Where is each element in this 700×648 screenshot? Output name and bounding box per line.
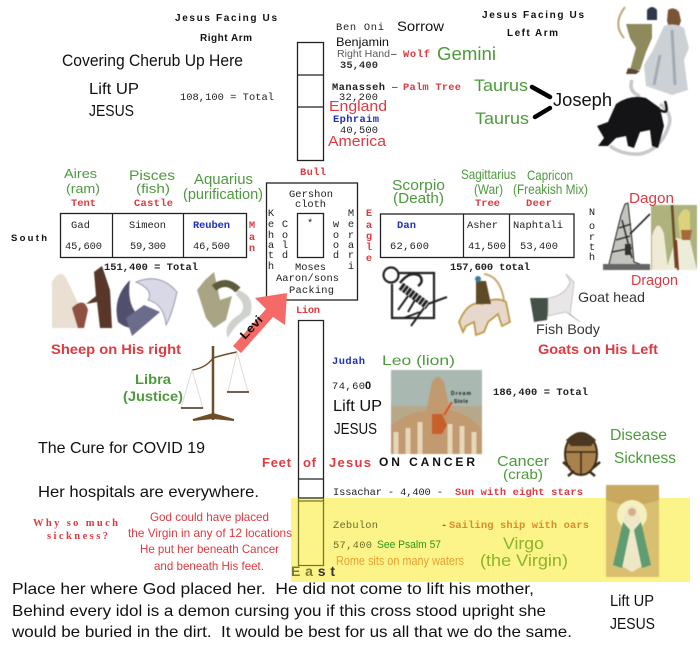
table: south camp: Gad [71,220,90,232]
left zodiac labels: Aires [64,166,98,181]
text: God could have placed: and beneath His feet. [154,559,264,573]
Judah block [332,352,455,438]
highlight: yellow band [291,498,690,582]
text: The cure: Her hospitals are everywhere. [38,484,259,501]
text: Why so much sickness: Why so much [33,518,118,529]
left zodiac labels: Aquarius [194,171,253,188]
text: Zebulon block: See Psalm 57 [377,539,441,551]
text: The cure [38,440,259,501]
text: Zebulon block: Zebulon [333,520,378,532]
panel: tabernacle centre: w [333,219,340,231]
panel: tabernacle centre: Aaron/sons [276,273,339,285]
text: Zebulon block [333,520,589,570]
left zodiac labels [64,166,263,210]
label: North: r [589,232,595,244]
Taurus and Joseph labels: Taurus [474,76,528,95]
labels: Dagon and Dragon [629,190,678,289]
label: Man: M [249,220,255,232]
north arm tribes: Ben Oni [336,22,384,34]
north arm tribes: Ephraim [333,114,379,126]
icon: pope photo [651,205,697,270]
labels: Dagon and Dragon: Dagon [629,190,674,207]
north arm tribes: Right Hand [337,49,390,60]
north arm tribes: – [392,82,398,93]
heading: top right labels [482,10,584,39]
labels: Sheep and Libra [51,341,183,404]
text: God could have placed: He put her beneath Cancer [140,542,279,556]
left zodiac labels: Tent [71,198,96,210]
total: south: 151,400 = Total [104,262,198,274]
north arm tribes: 32,200 [339,92,378,104]
labels: Sheep and Libra: Sheep on His right [51,341,181,357]
labels: Disease Sickness: Sickness [614,450,676,467]
panel: tabernacle centre: r [348,250,354,262]
table: south camp: Simeon [129,220,166,232]
panel: tabernacle centre: r [348,230,354,242]
labels: Cancer: Cancer [497,453,549,470]
table: south camp [60,213,246,258]
total: Judah camp: 186,400 = Total [493,387,588,399]
panel: tabernacle centre: Moses [295,262,326,274]
image: sphinx with dream stele: Stele [454,399,468,405]
north arm tribes: – [391,49,397,60]
panel: tabernacle centre: C [282,219,288,231]
north arm tribes: Wolf [403,49,430,61]
icon: Capricorn goat [530,274,580,322]
table: north camp [380,214,574,258]
table: north camp: 53,400 [520,241,558,253]
image: sphinx with dream stele [391,370,482,454]
labels: Dagon and Dragon: Dragon [631,272,678,289]
image: Virgin Mary card [606,485,659,577]
label: Man [249,220,255,255]
north arm tribes: England [329,98,387,115]
heading: top left labels: Lift UP [89,81,139,98]
panel: tabernacle centre: i [348,261,354,273]
left zodiac labels: Castle [134,198,173,210]
label: Man: a [249,232,255,244]
icon: scorpion [384,268,447,326]
label: Eagle: a [366,220,372,232]
north arm tribes: 40,500 [340,125,378,137]
label: Eagle [366,208,372,265]
right zodiac labels: Scorpio [392,177,445,194]
Judah block: Lift UP [333,398,382,415]
panel: tabernacle centre: K [268,208,275,220]
text: Zebulon block: - [441,520,447,532]
table: north camp: 62,600 [390,241,429,253]
table: north camp: Asher [467,220,498,232]
labels: Cancer: (crab) [503,466,543,482]
text: Issachar row: Sun with eight stars [455,487,583,499]
panel: tabernacle centre: l [282,240,288,252]
label: North: t [589,242,595,254]
text: God could have placed: the Virgin in any of 12 locations [128,526,292,540]
label: North: N [589,207,595,219]
label: Eagle: l [366,242,372,254]
text: Zebulon block: Virgo [503,534,544,553]
panel: tabernacle centre: e [268,219,274,231]
icon: Pisces fish [116,279,177,336]
panel: tabernacle centre: o [333,230,339,242]
label: Man: n [249,243,255,255]
Taurus and Joseph labels [474,76,612,128]
panel: tabernacle centre: d [333,250,339,262]
panel: tabernacle centre: t [268,250,274,262]
text: closing paragraph: Place her where God placed her. He did not come to lift his mother, [12,581,534,598]
Judah block: 0 [365,380,371,392]
cross: north arm [297,42,324,160]
north arm tribes: Gemini [437,44,496,64]
Taurus and Joseph labels: Joseph [553,90,612,110]
panel: tabernacle centre: * [307,218,313,230]
north arm tribes: Palm Tree [403,82,461,94]
text: Issachar row [333,487,583,499]
label: Eagle: e [366,253,372,265]
right zodiac labels: Deer [526,198,552,210]
labels: goat and fish: Goats on His Left [538,341,658,357]
north arm tribes: 35,400 [340,60,378,72]
north arm tribes: Benjamin [336,35,389,49]
text: Lift UP JESUS bottom: JESUS [610,616,655,633]
heading: top left labels [62,13,277,120]
heading: top left labels: Covering Cherub Up Here [62,51,243,70]
panel: tabernacle centre: M [348,208,354,220]
text: closing paragraph: would be buried in the dirt. It would be best for us all that we do the same. [11,624,572,641]
label: Lion: Lion [296,305,320,317]
north arm tribes: Manasseh [332,82,385,94]
labels: goat and fish [536,289,658,357]
label: North [589,207,595,264]
table: south camp: 59,300 [130,241,166,253]
text: closing paragraph: Behind every idol is a demon cursing you if this cross stood upright she [12,603,546,620]
table: north camp: Naphtali [513,220,563,232]
icon: man blowing shofar [52,266,112,328]
Taurus and Joseph labels: Taurus [475,109,529,128]
panel: tabernacle centre: d [282,250,288,262]
text: Why so much sickness: sickness? [47,531,108,542]
labels: Sheep and Libra: Libra [135,371,171,387]
label: North: h [589,252,595,264]
right zodiac labels: Tree [475,198,500,210]
cross: east arm [298,320,324,566]
left zodiac labels: Pisces [129,167,175,183]
text: Lift UP JESUS bottom: Lift UP [610,593,654,610]
right zodiac labels: Sagittarius [461,166,516,182]
table: north camp: 41,500 [468,241,506,253]
right zodiac labels: Capricon [527,167,573,183]
right zodiac labels [392,166,588,210]
headline: Feet of Jesus on Cancer: of [303,455,317,470]
panel: tabernacle centre: Gershon [289,189,333,201]
label: East: Ea st [291,563,335,579]
labels: Disease Sickness [610,427,676,467]
north arm tribes: Sorrow [397,18,445,34]
label: South: South [11,233,47,244]
label: North: o [589,221,595,233]
text: The cure: The Cure for COVID 19 [38,440,205,457]
labels: goat and fish: Goat head [578,289,645,305]
text: Why so much sickness [33,518,118,542]
icon: Gemini archer and Jesus figures [618,7,689,95]
Judah block: Judah [332,356,365,368]
table: south camp: Reuben [193,220,230,232]
image: sphinx with dream stele: Dream [451,391,472,397]
icon: Taurus bull [597,80,670,154]
heading: top left labels: JESUS [89,103,134,120]
arrow: Levi: Levi [237,313,266,342]
headline: Feet of Jesus on Cancer: Jesus [329,455,371,470]
headline: Feet of Jesus on Cancer: Feet [262,455,292,470]
panel: tabernacle centre: cloth [295,199,326,211]
text: God could have placed [128,510,292,573]
headline: Feet of Jesus on Cancer [262,455,475,470]
right zodiac labels: (Freakish Mix) [513,181,588,197]
text: Zebulon block: 57,400 [333,540,372,552]
heading: top right labels: Left Arm [507,28,558,39]
icon: Aquarius water bearer [197,272,252,338]
headline: Feet of Jesus on Cancer: ON CANCER [379,455,475,469]
Judah block: Leo (lion) [382,352,455,368]
label: Bull: Bull [300,167,326,179]
text: Zebulon block: Rome sits on many waters [336,553,464,568]
heading: top left labels: Jesus Facing Us [175,13,277,24]
table: south camp: 46,500 [193,241,230,253]
icon: scales of Libra [181,346,249,420]
north arm tribes: America [328,133,387,150]
text: Zebulon block: Sailing ship with oars [449,520,589,532]
labels: Disease Sickness: Disease [610,427,667,444]
left zodiac labels: (purification) [183,186,263,203]
heading: top right labels: Jesus Facing Us [482,10,584,21]
panel: tabernacle centre: o [333,240,339,252]
text: closing paragraph [11,581,572,641]
panel: tabernacle centre: o [282,230,288,242]
text: Zebulon block: (the Virgin) [480,551,568,570]
icon: Dagon engraving [603,203,650,270]
north arm tribes [328,18,496,150]
panel: tabernacle centre: a [348,240,354,252]
panel: tabernacle centre: Packing [289,285,334,297]
panel: tabernacle centre: a [268,240,274,252]
table: south camp: 45,600 [65,241,102,253]
panel: tabernacle centre: h [268,261,274,273]
left zodiac labels: (ram) [66,181,100,196]
heading: top left labels: 108,100 = Total [180,92,274,104]
labels: Sheep and Libra: (Justice) [123,388,183,404]
text: Lift UP JESUS bottom [610,593,655,633]
heading: top left labels: Right Arm [200,33,252,44]
panel: tabernacle centre: e [348,219,354,231]
icon: Sagittarius rider [459,274,510,335]
table: north camp: Dan [397,220,416,232]
labels: Cancer [497,453,549,482]
text: Issachar row: Issachar - 4,400 - [333,487,443,499]
text: God could have placed: God could have placed [150,510,269,524]
Judah block: 74,60 [332,381,365,393]
right zodiac labels: (Death) [393,190,444,207]
arrow: Levi [233,293,287,353]
label: Eagle: g [366,231,372,243]
label: Eagle: E [366,208,372,220]
panel: tabernacle centre: h [268,230,274,242]
total: north: 157,600 total [450,262,530,274]
panel: tabernacle centre [266,183,358,300]
left zodiac labels: (fish) [136,181,170,196]
Judah block: JESUS [334,421,377,438]
right zodiac labels: (War) [474,181,503,197]
icon: scarab [563,432,600,476]
labels: goat and fish: Fish Body [536,321,600,337]
